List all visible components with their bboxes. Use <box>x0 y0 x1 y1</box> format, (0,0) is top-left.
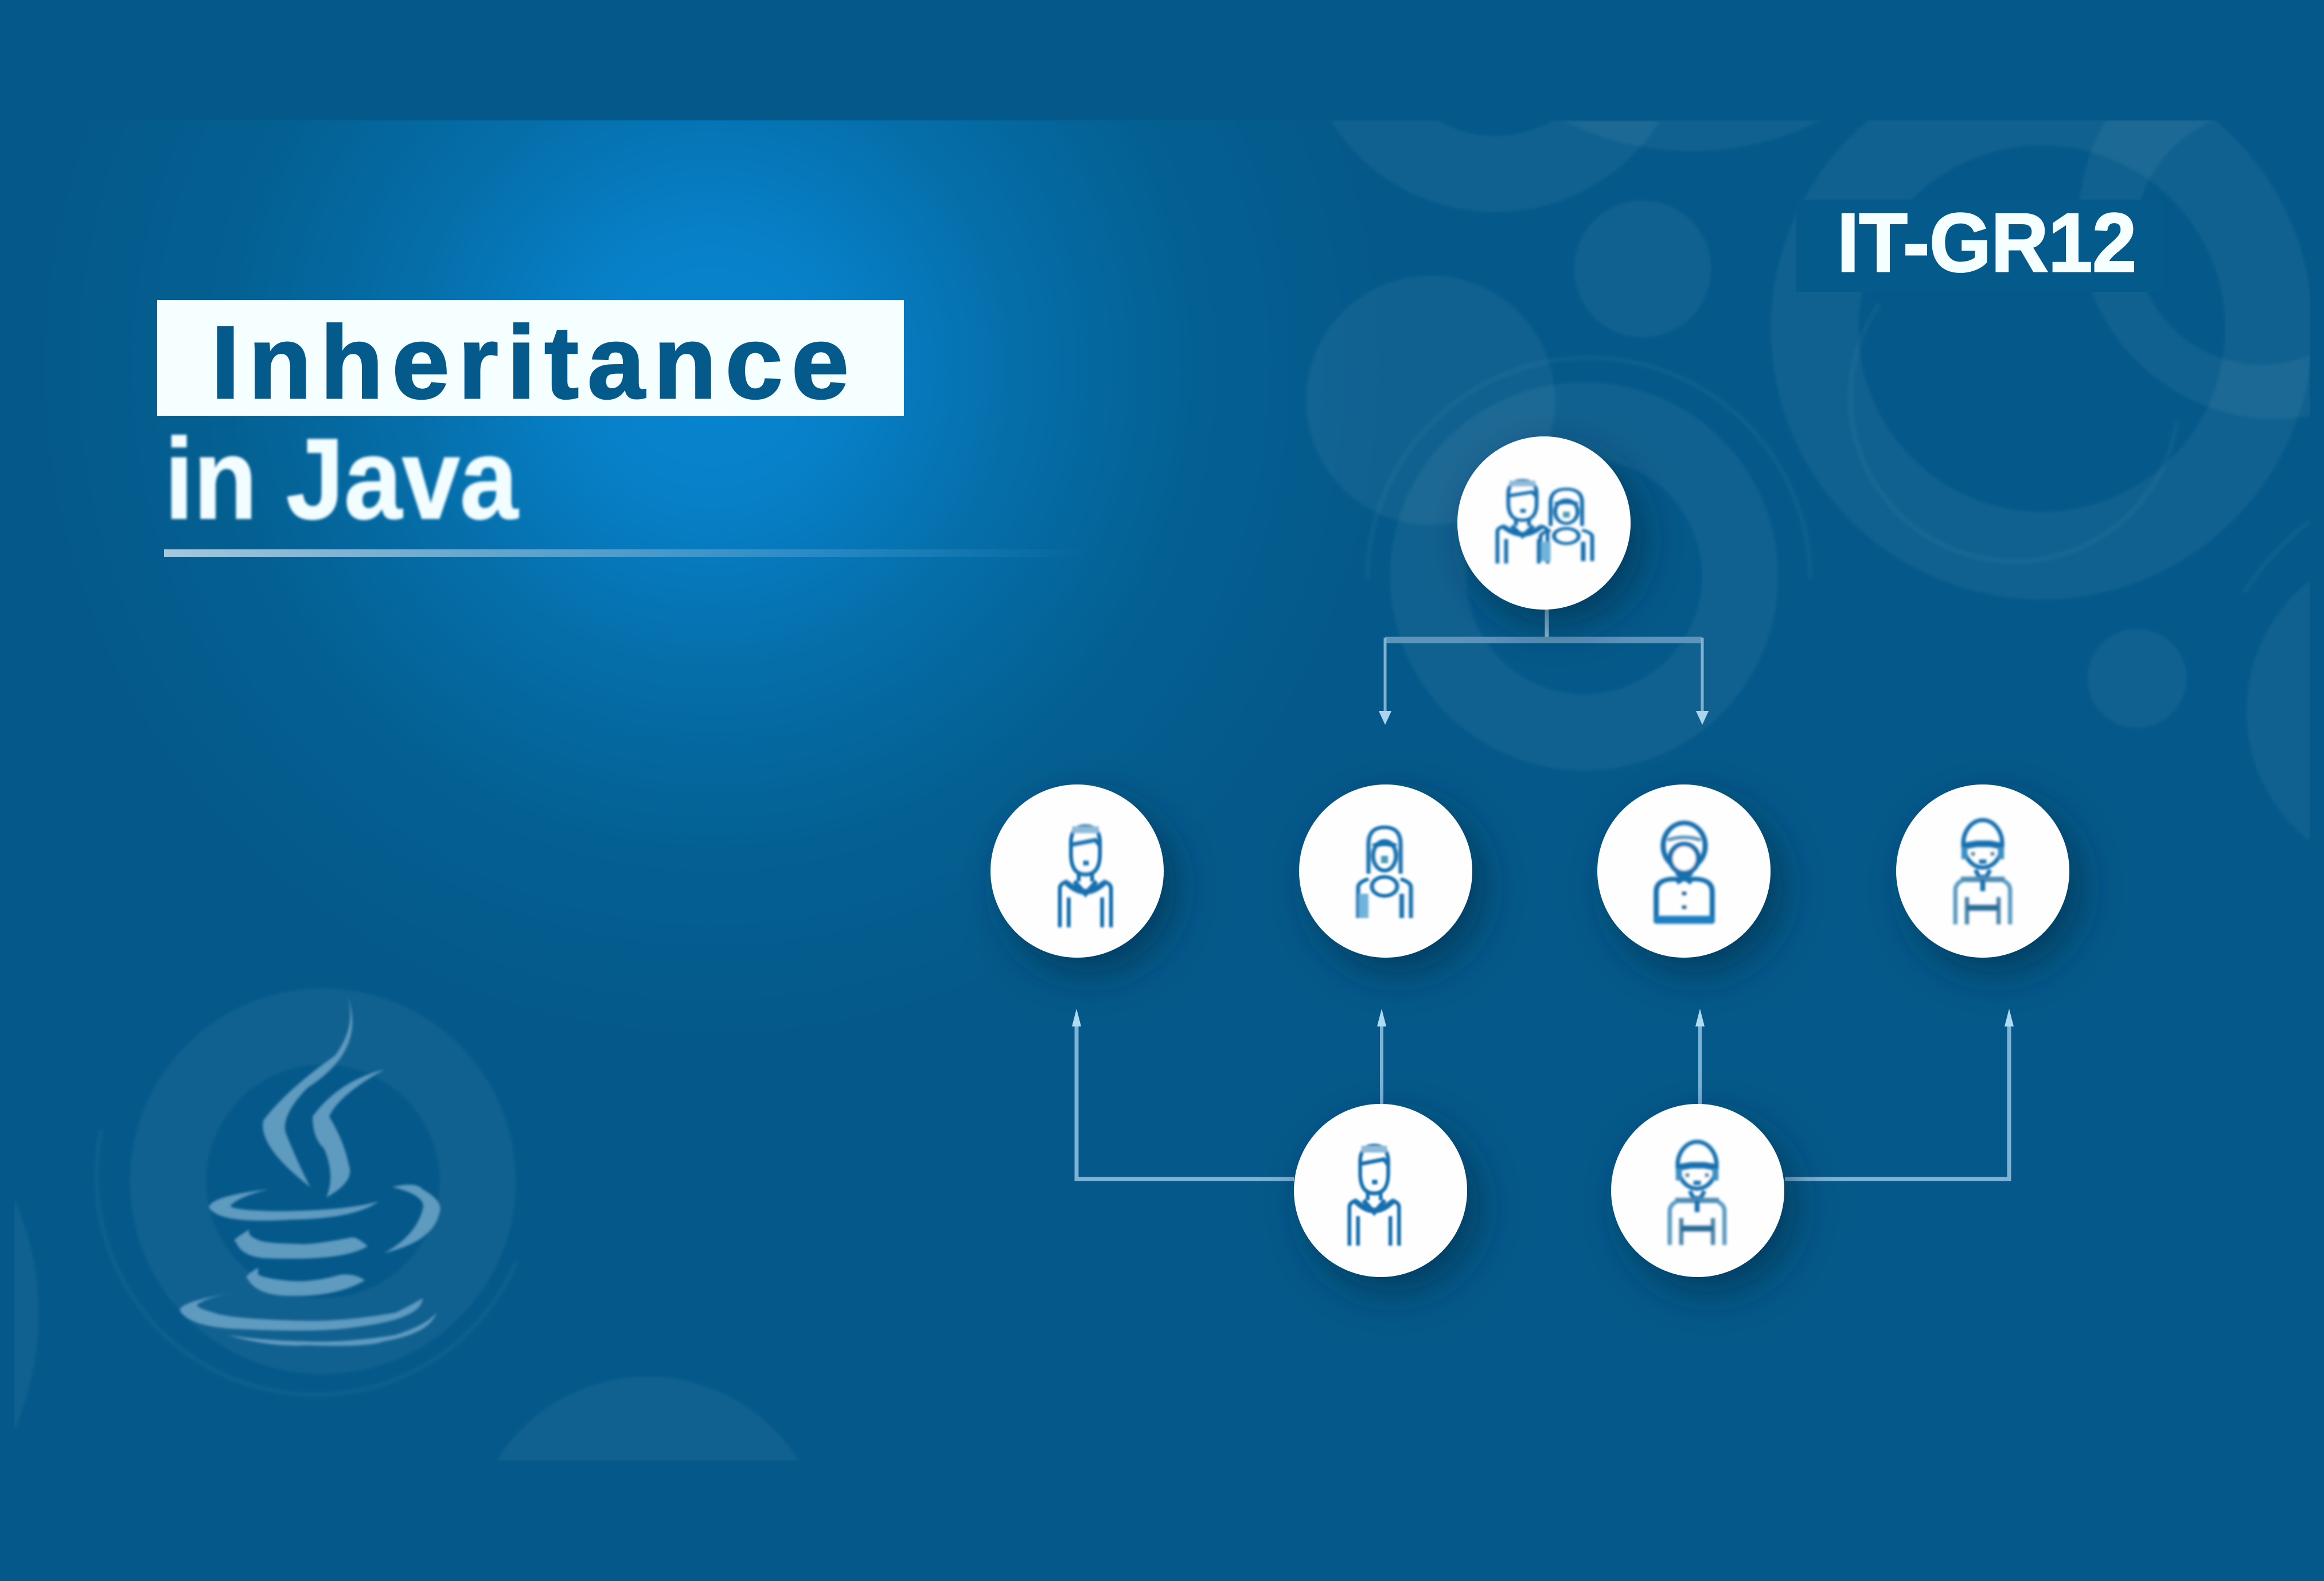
subtitle: in Java: in Java <box>165 415 519 543</box>
icon: person with cap <box>1955 820 2010 924</box>
java logo <box>180 997 440 1346</box>
node: child two <box>1299 784 1472 958</box>
title: Inheritance <box>157 300 904 420</box>
badge box <box>1796 200 2163 292</box>
title text: Inheritance <box>211 305 849 420</box>
connector arrow: lower left node to second child <box>1377 1009 1386 1104</box>
icon: young man <box>1350 1146 1399 1246</box>
badge text: IT-GR12 <box>1837 196 2136 289</box>
connector arrow: lower right node to third child <box>1695 1009 1705 1104</box>
connector arrow: lower left node to first child <box>1072 1009 1294 1179</box>
connector arrow: lower right node to fourth child <box>1785 1009 2014 1179</box>
badge: IT-GR12 <box>1796 196 2163 292</box>
icon: person with cap <box>1670 1142 1725 1245</box>
connector: parents to two children <box>1379 608 1709 725</box>
title box <box>157 300 904 416</box>
node: child one <box>991 784 1164 958</box>
node: child three <box>1597 784 1771 958</box>
node: grandchild left <box>1294 1104 1467 1277</box>
title underline <box>164 549 1087 557</box>
icon: young man <box>1060 826 1111 927</box>
icon: person with hood <box>1655 823 1714 924</box>
node: grandparents <box>1457 436 1631 610</box>
node: child four <box>1896 784 2069 958</box>
node: grandchild right <box>1611 1104 1784 1277</box>
icon: elderly couple <box>1498 481 1592 564</box>
icon: woman <box>1358 827 1411 918</box>
